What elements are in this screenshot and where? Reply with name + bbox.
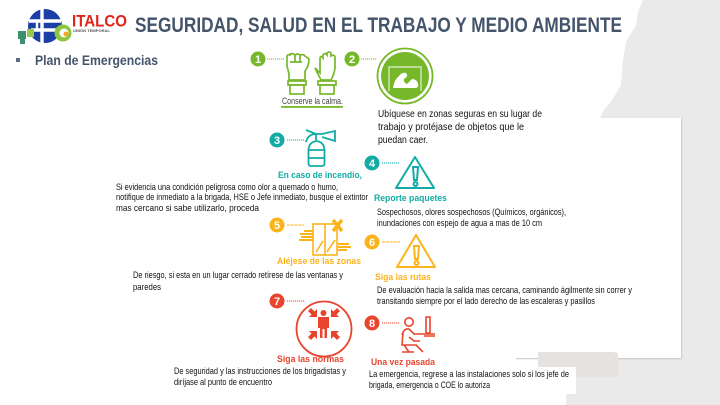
text block 6: De evaluación hacia la salida mas cercana, caminando ágilmente sin correr y [377, 285, 632, 295]
step 7: rules [270, 294, 352, 365]
step 6: routes: 6 [369, 237, 375, 249]
text block 6 [377, 285, 632, 306]
bullet [16, 58, 20, 62]
logo [18, 9, 127, 44]
step 4: packages: Reporte paquetes [374, 193, 447, 204]
text block 2: Ubíquese en zonas seguras en su lugar de [378, 109, 542, 120]
step 6: routes: Siga las rutas [375, 272, 431, 283]
step 4: packages: 4 [369, 158, 376, 170]
text block 7: diríjase al punto de encuentro [174, 377, 272, 387]
text block 3 [116, 182, 368, 213]
icon: meeting point [296, 302, 352, 356]
text block 8: brigada, emergencia o COE lo autoriza [369, 380, 491, 390]
text block 3: mas cercano si sabe utilizarlo, proceda [116, 203, 260, 213]
step 4: packages [364, 156, 447, 204]
step 7: rules: Siga las normas [277, 354, 344, 365]
text block 3: notifique de inmediato a la brigada, HSE o Jefe inmediato, busque el extintor [116, 192, 368, 202]
step 1: conserve la calma: 1 [255, 54, 261, 66]
step 7: rules: 7 [274, 296, 280, 308]
step 1: conserve la calma [250, 52, 343, 108]
icon: extinguisher [306, 130, 335, 166]
text block 3: Si evidencia una condición peligrosa como olor a quemado o humo, [116, 182, 338, 192]
icon: person under table [389, 67, 421, 91]
step 6: routes [364, 234, 435, 283]
icon: warning triangle [396, 157, 434, 188]
translucent tape [538, 352, 618, 377]
torn paper background [538, 0, 720, 405]
icon: hands [287, 52, 336, 94]
logo: ITALCO [72, 12, 127, 30]
step 2: protect yourself: 2 [349, 54, 355, 66]
step 8: once passed [364, 316, 436, 368]
icon: window with X [299, 220, 351, 255]
logo: UNIÓN TEMPORAL [73, 28, 111, 33]
icon: warning triangle [397, 235, 435, 267]
step 1: conserve la calma: Conserve la calma. [282, 96, 343, 106]
step 5: windows: Aléjese de las zonas [277, 256, 361, 267]
step 3: fire: En caso de incendio, [278, 170, 362, 181]
step 8: once passed: Una vez pasada [371, 357, 436, 368]
text block 2: trabajo y protéjase de objetos que le [378, 122, 524, 133]
step 3: fire [270, 130, 362, 181]
icon: person at desk [402, 317, 435, 352]
step 5: windows [270, 218, 361, 267]
text block 5 [133, 270, 343, 292]
step 8: once passed: 8 [369, 318, 375, 330]
step 3: fire: 3 [274, 135, 280, 147]
text block 8 [369, 369, 569, 390]
text block 5: De riesgo, si esta en un lugar cerrado retírese de las ventanas y [133, 270, 343, 280]
text block 5: paredes [133, 282, 161, 292]
text block 7: De seguridad y las instrucciones de los brigadistas y [174, 366, 346, 376]
subtitle: Plan de Emergencias [35, 53, 158, 68]
step 2: protect yourself [344, 48, 432, 104]
text block 2 [378, 109, 542, 146]
white content card [500, 100, 681, 358]
text block 8: La emergencia, regrese a las instalaciones solo si los jefe de [369, 369, 569, 379]
text block 6: transitando siempre por el lado derecho de las escaleras y pasillos [377, 296, 595, 306]
text block 7 [174, 366, 346, 387]
step 5: windows: 5 [274, 220, 280, 232]
text block 4 [377, 207, 566, 228]
text block 2: puedan caer. [378, 135, 428, 146]
text block 4: inundaciones con espejo de agua a mas de 10 cm [377, 218, 542, 228]
text block 4: Sospechosos, olores sospechosos (Químicos, orgánicos), [377, 207, 566, 217]
